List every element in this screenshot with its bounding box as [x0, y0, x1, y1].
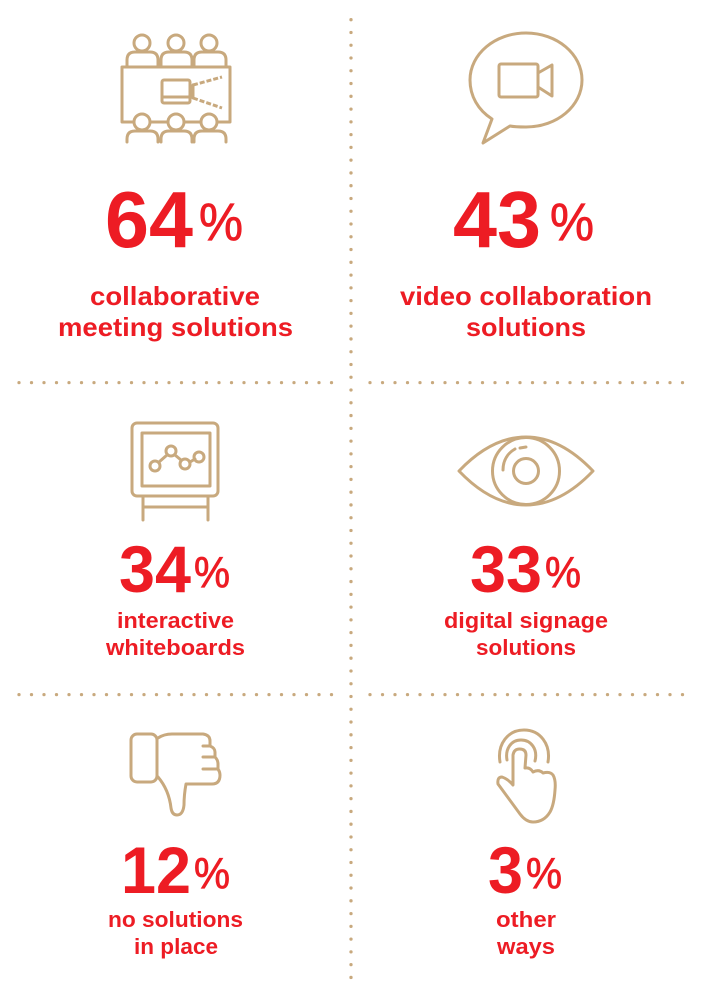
label: interactive whiteboards: whiteboards [105, 635, 245, 660]
label: other ways: ways [496, 934, 555, 959]
icon: touch hand [498, 730, 555, 822]
label: collaborative meeting solutions: meeting solutions [58, 312, 293, 342]
stat: 33 percent: % [545, 549, 581, 597]
stat: 64 percent: % [199, 193, 243, 252]
stat: 64 percent [105, 175, 243, 264]
stat: 43 percent: % [550, 193, 594, 252]
panel: no solutions in place [108, 734, 243, 959]
stat: 43 percent [453, 175, 594, 264]
label: video collaboration solutions [400, 281, 652, 342]
stat: 33 percent [470, 532, 581, 606]
icon: video speech bubble [470, 33, 582, 143]
label: video collaboration solutions: video collaboration [400, 281, 652, 311]
stat: 64 percent: 64 [105, 175, 194, 264]
icon: thumbs down [131, 734, 220, 815]
stat: 33 percent: 33 [470, 532, 542, 606]
icon: eye [459, 437, 593, 505]
label: no solutions in place [108, 907, 243, 959]
label: collaborative meeting solutions: collaborative [90, 281, 260, 311]
panel: digital signage solutions [444, 437, 608, 660]
label: other ways: other [496, 907, 556, 932]
stat: 12 percent [121, 833, 230, 907]
stat: 3 percent [488, 833, 562, 907]
label: collaborative meeting solutions [58, 281, 293, 342]
label: no solutions in place: no solutions [108, 907, 243, 932]
stat: 34 percent: 34 [119, 532, 191, 606]
label: video collaboration solutions: solutions [466, 312, 586, 342]
label: other ways [496, 907, 556, 959]
stat: 34 percent: % [194, 549, 230, 597]
label: no solutions in place: in place [134, 934, 218, 959]
label: digital signage solutions: digital signage [444, 608, 608, 633]
panel: collaborative meeting solutions [58, 35, 293, 342]
label: digital signage solutions: solutions [476, 635, 576, 660]
icon: whiteboard [132, 423, 218, 520]
stat: 34 percent [119, 532, 230, 606]
label: digital signage solutions [444, 608, 608, 660]
label: interactive whiteboards [105, 608, 245, 660]
stat: 43 percent: 43 [453, 175, 541, 264]
label: interactive whiteboards: interactive [117, 608, 234, 633]
stat: 3 percent: % [526, 850, 562, 898]
icon: meeting room [122, 35, 230, 142]
stat: 12 percent: % [194, 850, 230, 898]
panel: other ways [488, 730, 562, 959]
panel: video collaboration solutions [400, 33, 652, 342]
stat: 12 percent: 12 [121, 833, 191, 907]
panel: interactive whiteboards [105, 423, 245, 660]
stat: 3 percent: 3 [488, 833, 523, 907]
